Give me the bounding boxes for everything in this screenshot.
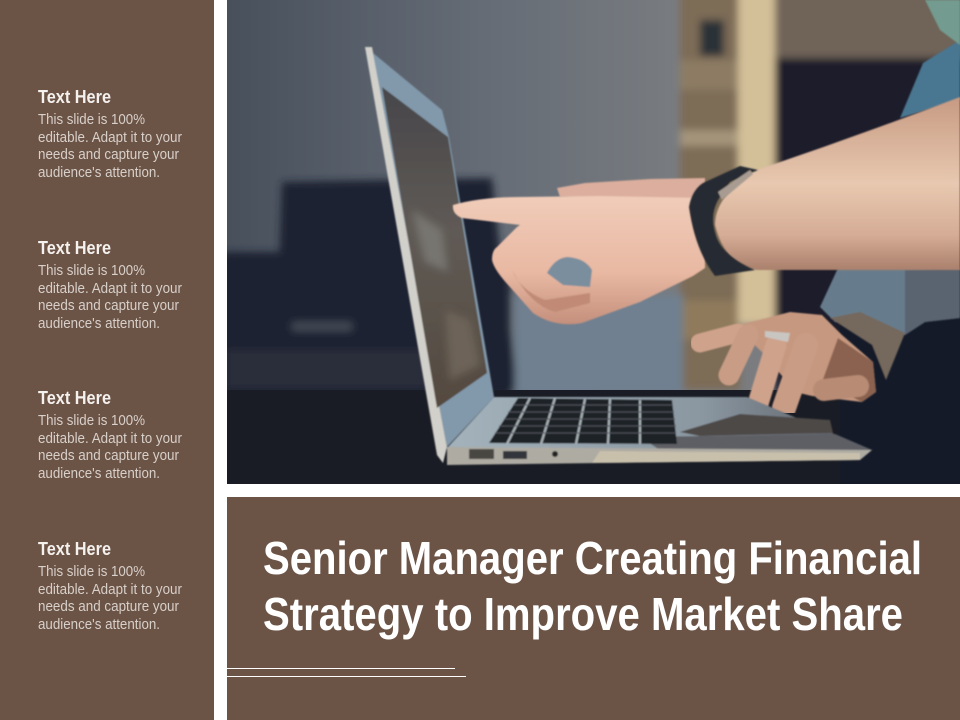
text block 3: This slide is 100%: [38, 412, 145, 429]
fingers: [700, 333, 738, 343]
text block 4: audience's attention.: [38, 616, 160, 633]
text block 2: [38, 238, 182, 332]
photo: hands pointing at a laptop: [220, 0, 960, 484]
keyboard: [489, 398, 677, 444]
text block 2: This slide is 100%: [38, 262, 145, 279]
text block 4: [38, 539, 182, 633]
text block 3: Text Here: [38, 388, 111, 408]
ports: [469, 449, 494, 459]
text block 1: editable. Adapt it to your: [38, 129, 182, 146]
panel: title: [227, 497, 960, 720]
photo background: [220, 0, 960, 484]
text block 4: This slide is 100%: [38, 563, 145, 580]
forearm: [715, 97, 960, 270]
text block 3: audience's attention.: [38, 465, 160, 482]
title: [263, 532, 922, 640]
text block 1: audience's attention.: [38, 164, 160, 181]
sweater and hair: [820, 0, 960, 380]
laptop base: [447, 397, 872, 450]
laptop lid: [365, 47, 447, 463]
wristband: [689, 166, 758, 276]
panel: sidebar: [0, 0, 214, 720]
text block 1: needs and capture your: [38, 146, 179, 163]
text block 1: Text Here: [38, 87, 111, 107]
text block 2: needs and capture your: [38, 297, 179, 314]
text block 4: Text Here: [38, 539, 111, 559]
text block 2: audience's attention.: [38, 315, 160, 332]
text block 2: editable. Adapt it to your: [38, 280, 182, 297]
text block 2: Text Here: [38, 238, 111, 258]
text block 1: [38, 87, 182, 181]
text block 4: editable. Adapt it to your: [38, 581, 182, 598]
text block 1: This slide is 100%: [38, 111, 145, 128]
back hand fingers: [556, 177, 706, 198]
text block 3: editable. Adapt it to your: [38, 430, 182, 447]
text block 3: needs and capture your: [38, 447, 179, 464]
lower hand: [700, 312, 876, 408]
back of hand: [735, 312, 876, 402]
laptop screen: [382, 87, 487, 408]
curled finger shading: [520, 284, 590, 312]
finger gap: [547, 257, 592, 287]
text block 3: [38, 388, 182, 482]
text block 4: needs and capture your: [38, 598, 179, 615]
pointing hand: [453, 196, 705, 324]
laptop: [365, 47, 872, 465]
